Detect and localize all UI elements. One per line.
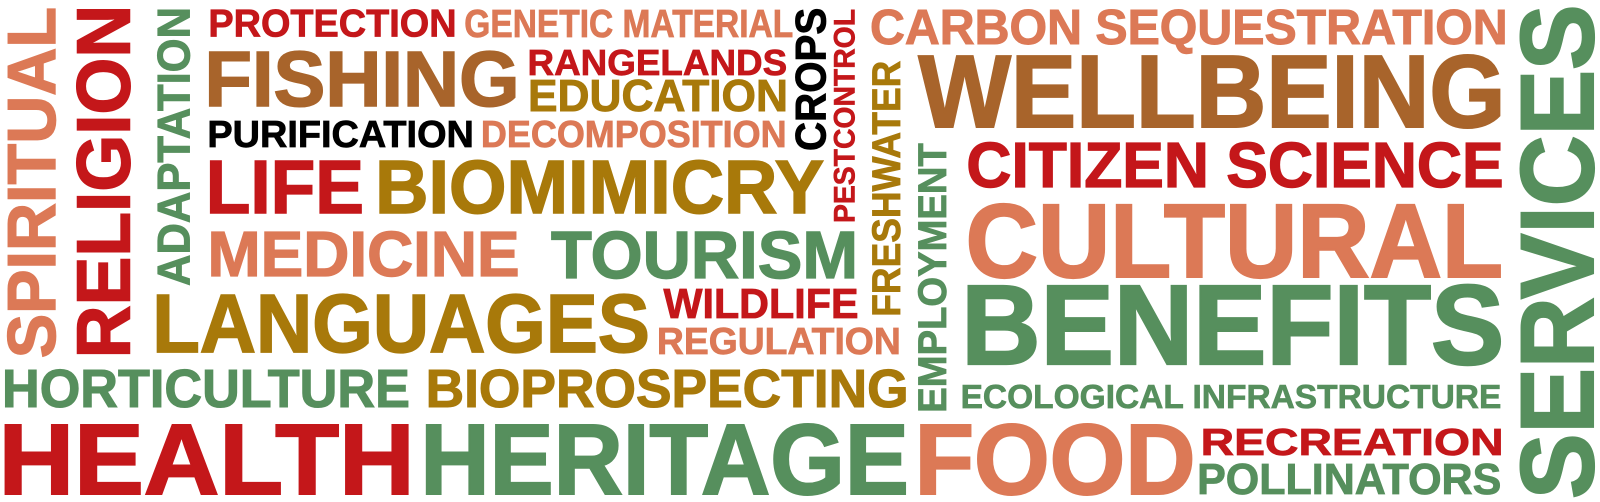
word: REGULATION: REGULATION	[657, 321, 901, 363]
word: EDUCATION: EDUCATION	[528, 70, 788, 121]
word: LIFE: LIFE	[206, 146, 364, 230]
word: CARBON SEQUESTRATION: CARBON SEQUESTRATION	[870, 0, 1508, 55]
word: WELLBEING: WELLBEING	[918, 34, 1506, 149]
word: DECOMPOSITION: DECOMPOSITION	[481, 114, 787, 156]
word: PURIFICATION: PURIFICATION	[207, 114, 474, 156]
word: PROTECTION: PROTECTION	[208, 3, 457, 46]
word: RANGELANDS: RANGELANDS	[528, 42, 787, 83]
word: ADAPTATION: ADAPTATION	[148, 7, 200, 286]
word: LANGUAGES: LANGUAGES	[152, 277, 650, 370]
word: GENETIC MATERIAL: GENETIC MATERIAL	[464, 3, 793, 46]
word: BENEFITS: BENEFITS	[961, 262, 1504, 389]
word: TOURISM: TOURISM	[551, 218, 858, 293]
word: ECOLOGICAL INFRASTRUCTURE: ECOLOGICAL INFRASTRUCTURE	[961, 379, 1501, 416]
word: CITIZEN SCIENCE: CITIZEN SCIENCE	[966, 129, 1504, 201]
word: BIOMIMICRY: BIOMIMICRY	[375, 146, 824, 230]
word: FISHING: FISHING	[204, 35, 520, 123]
word: PESTCONTROL: PESTCONTROL	[828, 9, 861, 223]
word: FRESHWATER: FRESHWATER	[865, 61, 909, 317]
word: BIOPROSPECTING: BIOPROSPECTING	[426, 359, 909, 419]
word: WILDLIFE: WILDLIFE	[664, 280, 858, 327]
word: MEDICINE: MEDICINE	[208, 218, 520, 290]
word: EMPLOYMENT: EMPLOYMENT	[911, 143, 955, 413]
word: RELIGION: RELIGION	[62, 5, 146, 358]
word: CULTURAL: CULTURAL	[966, 183, 1503, 300]
word: RECREATION: RECREATION	[1201, 422, 1504, 464]
word: HORTICULTURE: HORTICULTURE	[2, 359, 410, 419]
word: CROPS: CROPS	[788, 8, 836, 151]
